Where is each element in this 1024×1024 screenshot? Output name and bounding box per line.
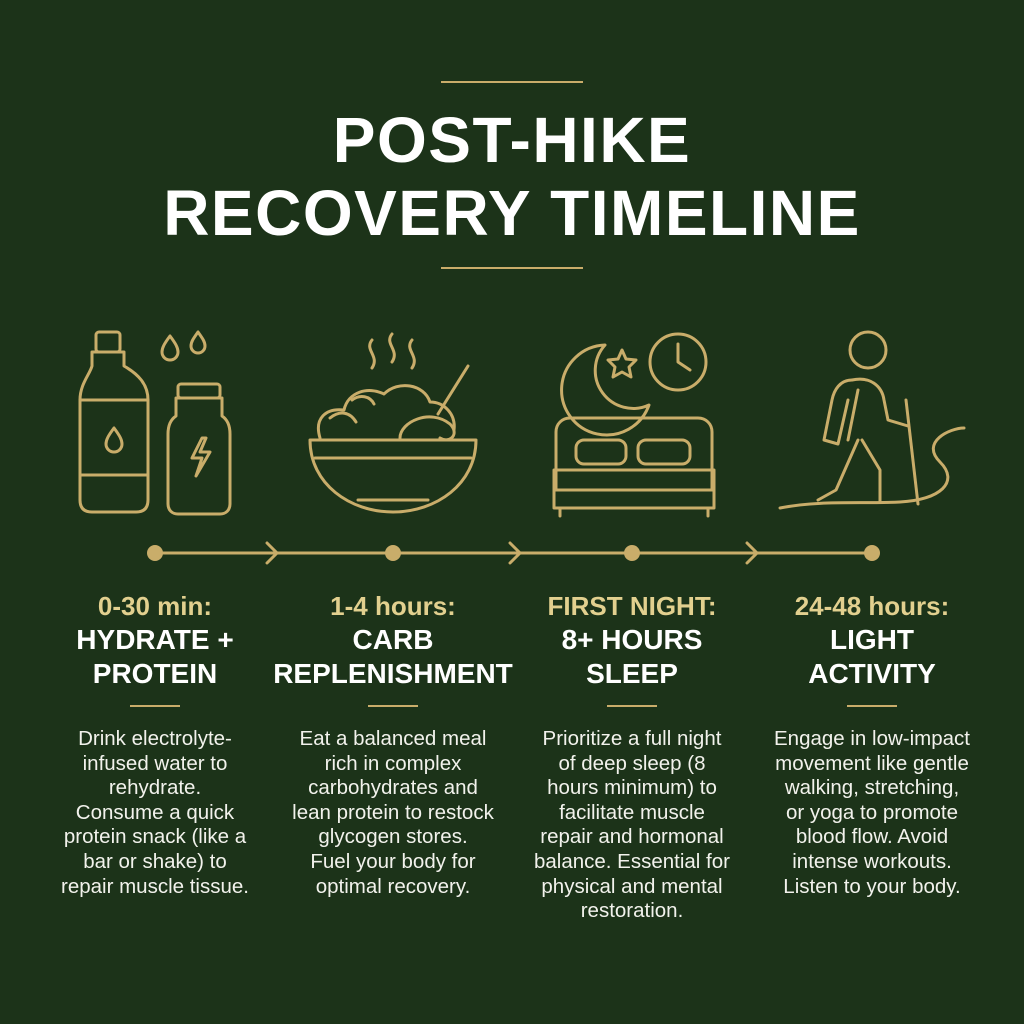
panel: 1-4 hours: carbohydrates and: [308, 776, 478, 799]
panel: 0-30 min: 0-30 min:: [98, 591, 212, 621]
panel: 0-30 min: Consume a quick: [76, 801, 234, 824]
panel: 24-48 hours: or yoga to promote: [786, 801, 958, 824]
panel: 1-4 hours: CARB: [353, 624, 433, 655]
panel: 1-4 hours: REPLENISHMENT: [273, 658, 513, 689]
panel: 24-48 hours: Engage in low-impact: [774, 727, 970, 750]
panel: 1-4 hours: lean protein to restock: [292, 801, 494, 824]
panel: 1-4 hours: Eat a balanced meal: [300, 727, 486, 750]
panel: 1-4 hours: [273, 591, 513, 898]
panel: 0-30 min: Drink electrolyte-: [78, 727, 232, 750]
timeline: [147, 541, 880, 565]
panel: 24-48 hours: [774, 591, 970, 898]
panel: first night: 8+ HOURS: [562, 624, 702, 655]
panel: 24-48 hours: intense workouts.: [792, 850, 952, 873]
panel: 0-30 min: protein snack (like a: [64, 825, 246, 848]
panel: 0-30 min: infused water to: [83, 752, 227, 775]
panel: 0-30 min: rehydrate.: [109, 776, 201, 799]
panel: 1-4 hours: Fuel your body for: [310, 850, 476, 873]
icon: hiker on path: [780, 332, 964, 508]
panel: 24-48 hours: ACTIVITY: [808, 658, 936, 689]
icons: [78, 330, 966, 518]
panel: 24-48 hours: Listen to your body.: [783, 875, 961, 898]
panel: first night: SLEEP: [586, 658, 678, 689]
panel: 24-48 hours: 24-48 hours:: [795, 591, 949, 621]
title: RECOVERY TIMELINE: [163, 177, 861, 249]
panel: 24-48 hours: blood flow. Avoid: [796, 825, 948, 848]
panel: first night: of deep sleep (8: [558, 752, 706, 775]
panel: first night: facilitate muscle: [559, 801, 705, 824]
panel: 24-48 hours: LIGHT: [830, 624, 914, 655]
title: [163, 104, 861, 249]
panel: first night: [534, 591, 730, 922]
panel: first night: physical and mental: [541, 875, 723, 898]
panel: 0-30 min: [61, 591, 249, 898]
panel: first night: repair and hormonal: [540, 825, 724, 848]
panel: first night: balance. Essential for: [534, 850, 730, 873]
panel: 24-48 hours: movement like gentle: [775, 752, 969, 775]
panel: first night: restoration.: [581, 899, 683, 922]
panel: 0-30 min: HYDRATE +: [76, 624, 234, 655]
title rule bottom: [441, 267, 583, 269]
title rule top: [441, 81, 583, 83]
panel: 1-4 hours: rich in complex: [325, 752, 461, 775]
panel: first night: hours minimum) to: [547, 776, 717, 799]
icon: moon, star, clock, bed: [554, 334, 714, 516]
panel: first night: FIRST NIGHT:: [548, 591, 716, 621]
icon: bottles and drops: [80, 332, 230, 514]
panel: 1-4 hours: 1-4 hours:: [330, 591, 456, 621]
panel: 0-30 min: bar or shake) to: [83, 850, 227, 873]
panel: 1-4 hours: optimal recovery.: [316, 875, 470, 898]
icon: bowl with steam: [310, 334, 476, 512]
panel: 0-30 min: PROTEIN: [93, 658, 217, 689]
panel: first night: Prioritize a full night: [543, 727, 721, 750]
panel: 1-4 hours: glycogen stores.: [318, 825, 468, 848]
panel: 24-48 hours: walking, stretching,: [785, 776, 959, 799]
title: POST-HIKE: [333, 104, 691, 176]
panel: 0-30 min: repair muscle tissue.: [61, 875, 249, 898]
